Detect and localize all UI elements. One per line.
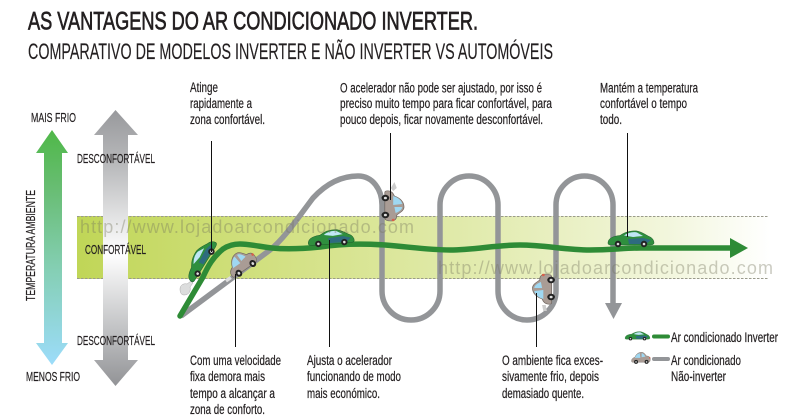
icon: green car climbing <box>181 236 219 284</box>
text: mantem: todo. <box>600 112 622 127</box>
text: velocidade fixa: fixa demora mais <box>190 369 265 384</box>
text: atinge: Atinge <box>190 80 218 95</box>
comfort double arrow <box>94 110 138 386</box>
icon: green car mid <box>307 228 355 248</box>
text: ambiente: demasiado quente. <box>502 386 584 401</box>
leader lines <box>212 133 628 347</box>
text: ajusta <box>307 353 401 401</box>
text: velocidade fixa: Com uma velocidade <box>190 353 281 368</box>
text: acelerador: preciso muito tempo para ficar confortável, para <box>340 96 552 111</box>
text: mantem: Mantém a temperatura <box>600 80 698 96</box>
text: acelerador: pouco depois, ficar novamente desconfortável. <box>340 112 543 127</box>
label: menos frio: MENOS FRIO <box>26 370 80 384</box>
legend: Não-inverter <box>671 369 726 384</box>
text: mantem: confortável o tempo <box>600 96 687 111</box>
icon: grey car ascending <box>532 274 555 311</box>
temperature double arrow <box>36 130 68 365</box>
legend: inverter icon <box>625 332 650 340</box>
text: ambiente: sivamente frio, depois <box>502 369 599 384</box>
watermark 1: http://www.lojadoarcondicionado.com <box>80 217 414 237</box>
icon: grey car climbing <box>216 245 260 285</box>
label: desconfortavel top: DESCONFORTÁVEL <box>77 151 155 166</box>
legend <box>625 330 778 384</box>
text: velocidade fixa <box>190 353 281 417</box>
icon: green car end <box>608 231 654 247</box>
text: acelerador <box>340 80 552 127</box>
text: atinge: zona confortável. <box>190 112 265 127</box>
non-inverter curve <box>181 176 622 320</box>
text: mantem <box>600 80 698 127</box>
text: ambiente: O ambiente fica exces- <box>502 353 603 368</box>
text: ajusta: Ajusta o acelerador <box>307 353 392 368</box>
label: confortavel: CONFORTÁVEL <box>85 242 146 257</box>
icon: exhaust smoke green car <box>180 281 193 295</box>
text: ajusta: mais económico. <box>307 386 380 401</box>
text: velocidade fixa: tempo a alcançar a <box>190 386 275 401</box>
text: atinge: rapidamente a <box>190 96 252 111</box>
comfort zone band <box>77 216 770 279</box>
text: ajusta: funcionando de modo <box>307 369 401 384</box>
title: AS VANTAGENS DO AR CONDICIONADO INVERTER. <box>28 8 478 36</box>
icon: grey car descending <box>382 182 404 221</box>
text: acelerador: O acelerador não pode ser ajustado, por isso é <box>340 80 542 96</box>
text: ambiente <box>502 353 603 401</box>
label: temperature axis: TEMPERATURA AMBIENTE <box>24 190 38 301</box>
label: mais frio: MAIS FRIO <box>31 111 76 125</box>
text: atinge <box>190 80 265 127</box>
watermark 2: http://www.lojadoarcondicionado.com <box>438 258 773 278</box>
label: desconfortavel bottom: DESCONFORTÁVEL <box>77 333 155 348</box>
inverter curve <box>180 238 748 316</box>
legend: Ar condicionado <box>671 353 741 368</box>
text: velocidade fixa: zona de conforto. <box>190 402 265 417</box>
legend: non-inverter icon <box>632 352 650 364</box>
